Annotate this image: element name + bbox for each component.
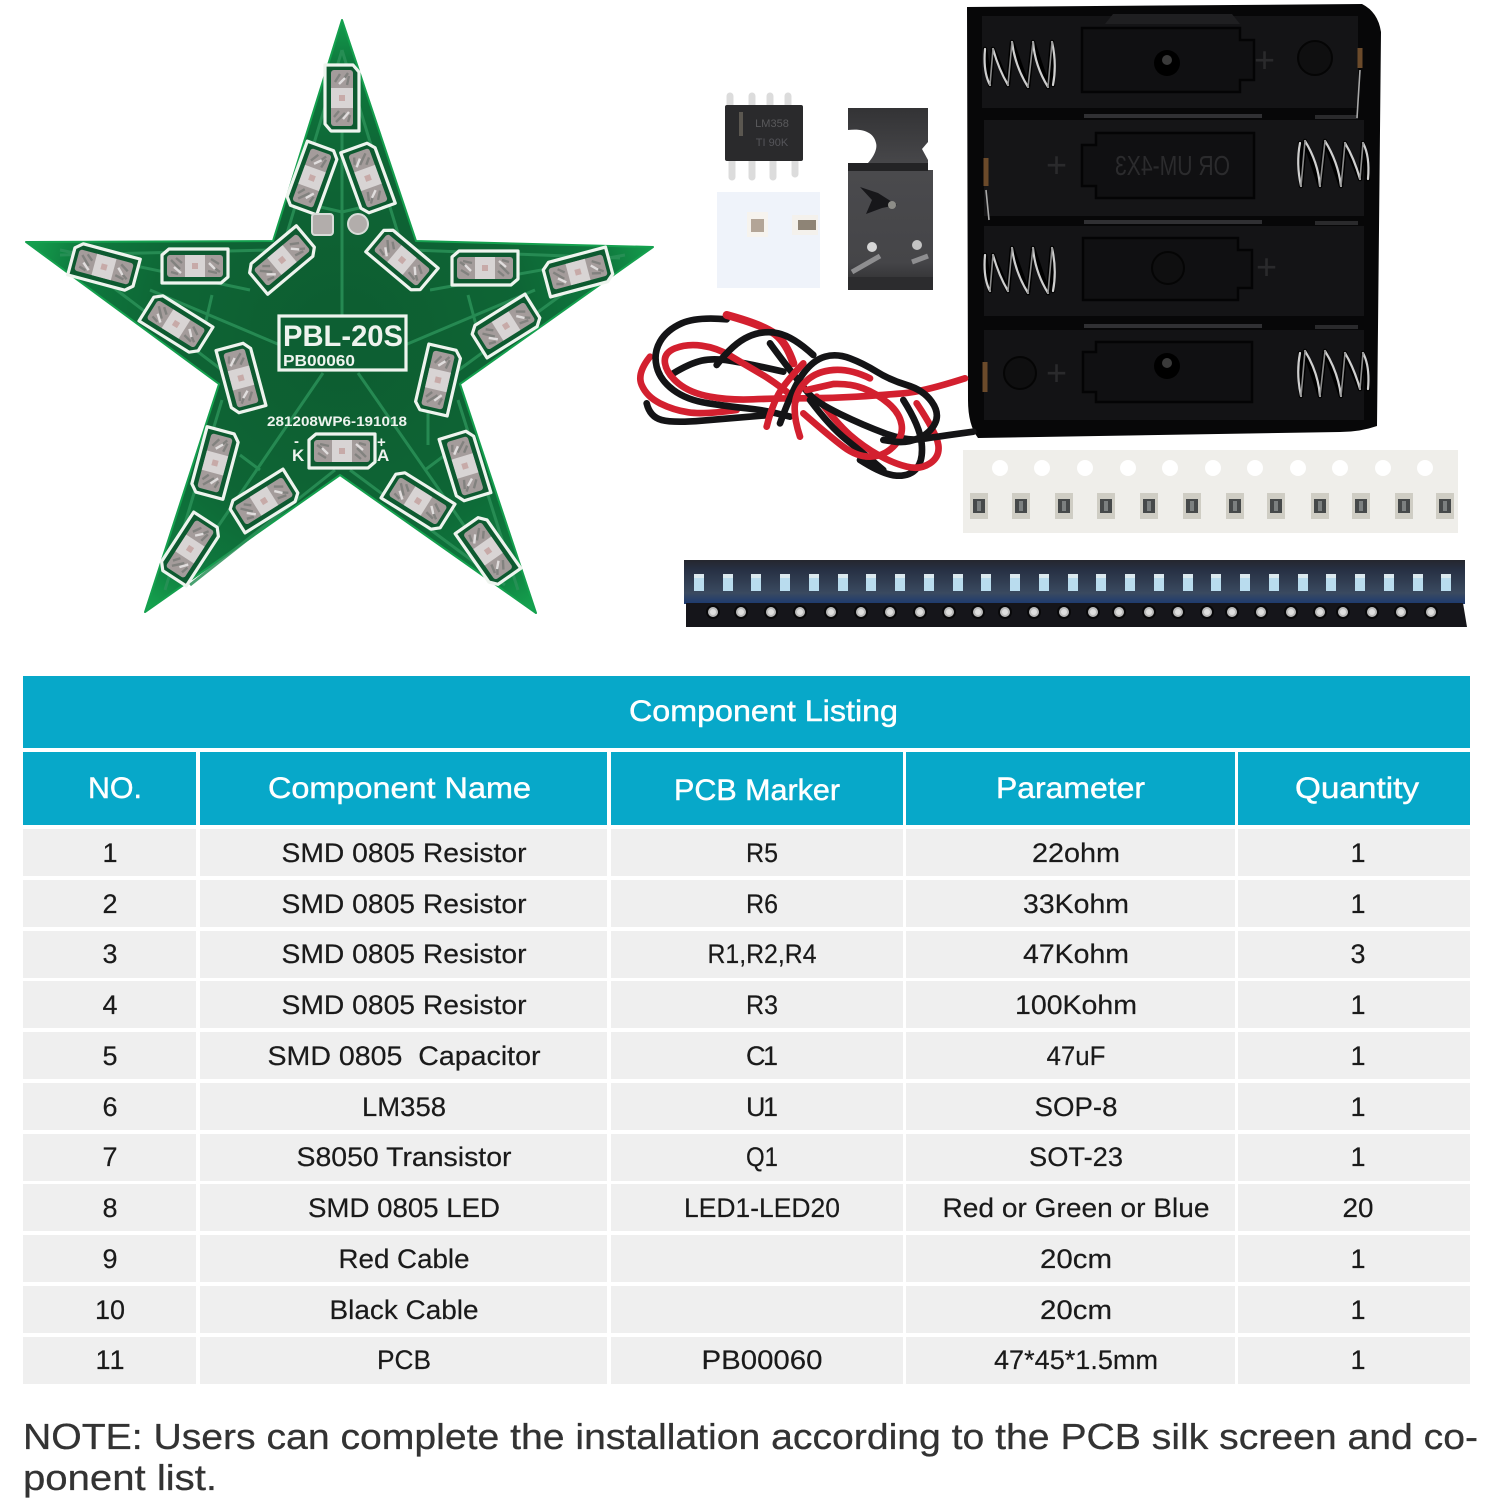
- row 6: LM358: [362, 1092, 446, 1122]
- compartment 2: OR UM-4X3: [1115, 150, 1230, 181]
- row 7: 7: [102, 1142, 118, 1172]
- row 5: 47uF: [1046, 1041, 1106, 1071]
- row 9: [23, 1235, 1470, 1282]
- row 2: 1: [1350, 889, 1366, 919]
- row 10: Black Cable: [330, 1295, 478, 1325]
- row 1: [23, 829, 1470, 876]
- row 4: SMD 0805 Resistor: [282, 990, 527, 1020]
- compartment 2: [1046, 133, 1368, 198]
- row 6: 6: [102, 1092, 118, 1122]
- resistor strip: [963, 450, 1458, 533]
- row 9: 9: [102, 1244, 118, 1274]
- small pads R and C: [312, 214, 368, 235]
- polarity marks: A: [377, 446, 389, 465]
- row 1: 1: [1350, 838, 1366, 868]
- component listing table: [23, 676, 1470, 1384]
- row 1: SMD 0805 Resistor: [282, 838, 527, 868]
- PCB label box: PBL-20S: [283, 320, 403, 353]
- installation note: [23, 1416, 1478, 1498]
- row 8: 8: [102, 1193, 118, 1223]
- row 2: 2: [102, 889, 118, 919]
- row 10: [23, 1286, 1470, 1333]
- row 5: [23, 1032, 1470, 1079]
- installation note: ponent list.: [23, 1457, 217, 1498]
- row 2: R6: [746, 889, 778, 919]
- row 9: 20cm: [1040, 1244, 1112, 1274]
- row 1: 22ohm: [1032, 838, 1120, 868]
- row 10: 1: [1350, 1295, 1366, 1325]
- LED pads on star: [68, 65, 614, 588]
- compartment 1: [985, 28, 1332, 92]
- row 5: C1: [746, 1041, 778, 1071]
- polarity marks: K: [292, 446, 305, 465]
- row 3: 3: [1350, 939, 1366, 969]
- row 11: 1: [1350, 1345, 1366, 1375]
- PCB label box: PB00060: [283, 353, 355, 370]
- row 5: 5: [102, 1041, 118, 1071]
- table title bar: Component Listing: [629, 695, 898, 728]
- row 7: [23, 1134, 1470, 1181]
- polarity marks: [292, 433, 389, 465]
- row 6: 1: [1350, 1092, 1366, 1122]
- polarity marks: -: [294, 433, 299, 450]
- red and black cable: [640, 315, 973, 476]
- table header row: Component Name: [268, 772, 531, 805]
- row 6: SOP-8: [1034, 1092, 1118, 1122]
- battery holder: [967, 4, 1381, 438]
- compartment 1: +: [1254, 39, 1275, 80]
- row 4: 4: [102, 990, 118, 1020]
- row 3: 47Kohm: [1023, 939, 1129, 969]
- LED strip: [684, 560, 1467, 627]
- table header row: [23, 752, 1470, 825]
- PCB serial number: 281208WP6-191018: [267, 413, 407, 429]
- compartment 2: +: [1046, 144, 1067, 185]
- installation note: NOTE: Users can complete the installation according to the PCB silk screen and co-: [23, 1416, 1478, 1457]
- capacitor and resistor on white tape: [717, 192, 820, 288]
- transistor tape: [848, 108, 933, 290]
- row 4: [23, 981, 1470, 1028]
- IC chip LM358: TI 90K: [756, 137, 789, 149]
- row 5: 1: [1350, 1041, 1366, 1071]
- row 8: SMD 0805 LED: [308, 1193, 500, 1223]
- IC chip LM358: LM358: [755, 118, 789, 130]
- row 11: [23, 1337, 1470, 1384]
- IC chip LM358: [725, 96, 803, 177]
- star PCB board: [26, 20, 653, 613]
- table header row: PCB Marker: [674, 774, 840, 807]
- polarity marks: +: [377, 434, 386, 451]
- row 8: LED1-LED20: [684, 1193, 840, 1223]
- compartment 4: +: [1046, 352, 1067, 393]
- compartment 4: [1004, 342, 1368, 402]
- row 3: 3: [102, 939, 118, 969]
- row 6: U1: [746, 1092, 778, 1122]
- row 7: 1: [1350, 1142, 1366, 1172]
- row 8: 20: [1342, 1193, 1374, 1223]
- row 3: SMD 0805 Resistor: [282, 939, 527, 969]
- row 4: R3: [746, 990, 778, 1020]
- row 4: 100Kohm: [1015, 990, 1137, 1020]
- row 11: 11: [96, 1345, 124, 1375]
- row 6: [23, 1083, 1470, 1130]
- table title bar: [23, 676, 1470, 748]
- compartment 3: +: [1256, 246, 1277, 287]
- row 7: S8050 Transistor: [296, 1142, 512, 1172]
- row 10: 10: [95, 1295, 125, 1325]
- row 2: SMD 0805 Resistor: [282, 889, 527, 919]
- row 9: 1: [1350, 1244, 1366, 1274]
- row 2: [23, 880, 1470, 927]
- row 4: 1: [1350, 990, 1366, 1020]
- row 8: [23, 1184, 1470, 1231]
- row 1: R5: [746, 838, 778, 868]
- row 11: PCB: [377, 1345, 431, 1375]
- row 5: SMD 0805 Capacitor: [268, 1041, 541, 1071]
- row 8: Red or Green or Blue: [942, 1193, 1210, 1223]
- compartment 3: [985, 238, 1277, 300]
- row 3: R1,R2,R4: [708, 939, 816, 969]
- row 2: 33Kohm: [1023, 889, 1129, 919]
- row 9: Red Cable: [338, 1244, 470, 1274]
- row 10: 20cm: [1040, 1295, 1112, 1325]
- row 7: Q1: [746, 1142, 778, 1172]
- row 3: [23, 931, 1470, 978]
- table header row: Parameter: [996, 772, 1145, 805]
- table header row: NO.: [88, 772, 142, 805]
- row 11: PB00060: [702, 1345, 822, 1375]
- row 1: 1: [102, 838, 118, 868]
- row 11: 47*45*1.5mm: [994, 1345, 1158, 1375]
- PCB label box: [279, 316, 406, 370]
- table header row: Quantity: [1295, 772, 1419, 805]
- row 7: SOT-23: [1029, 1142, 1123, 1172]
